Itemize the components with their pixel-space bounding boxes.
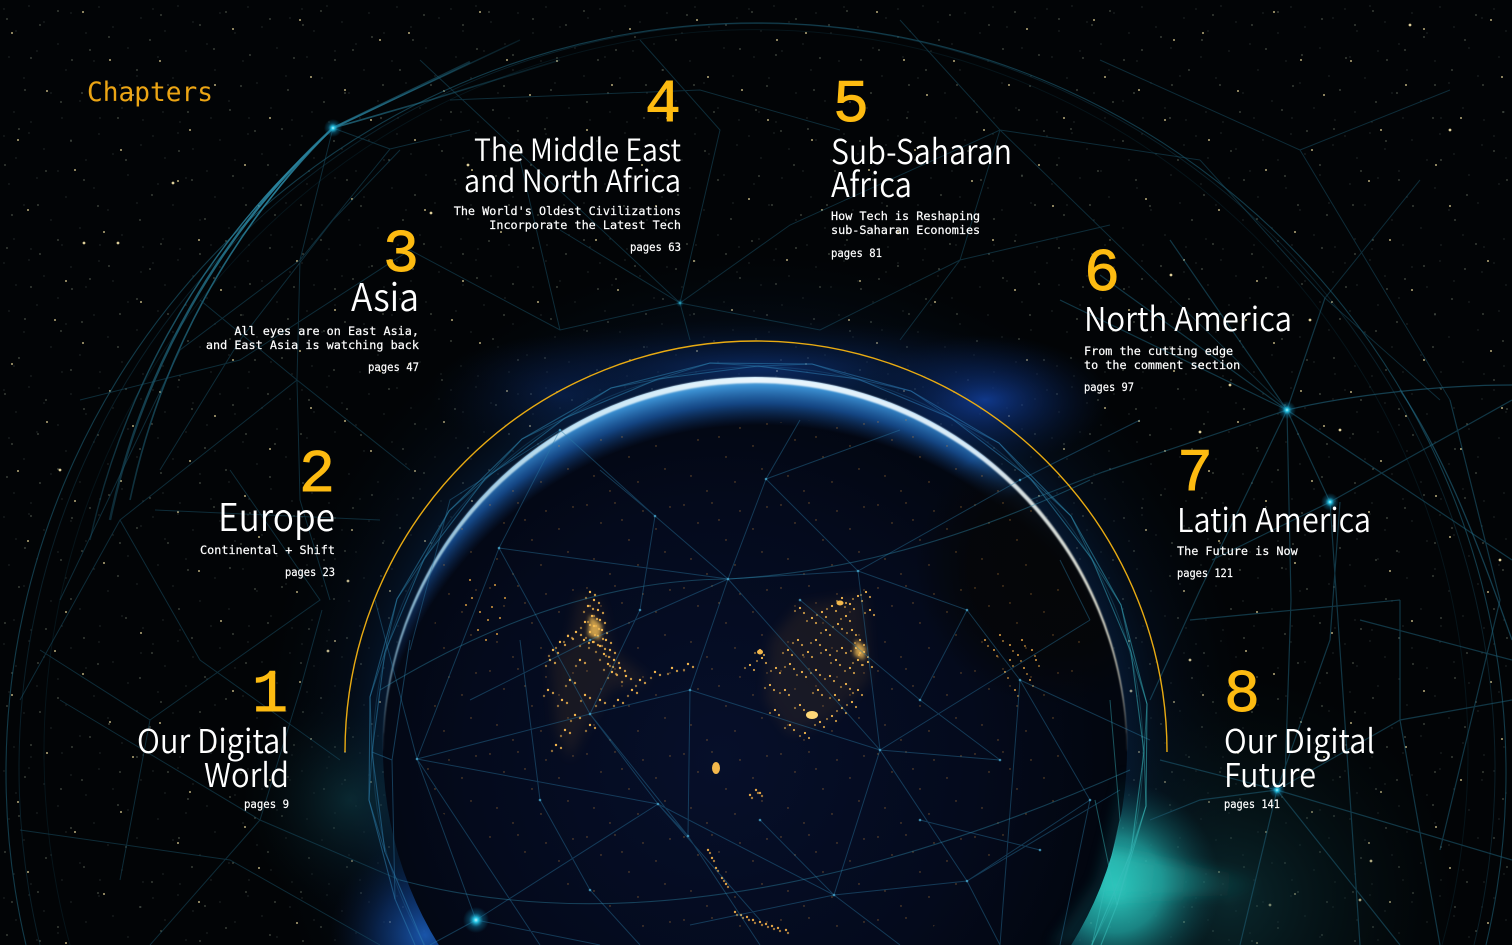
subtitle: sub-Saharan Economies: [831, 223, 980, 237]
subtitle: Continental + Shift: [200, 543, 335, 557]
chapter 5: [831, 72, 1012, 260]
subtitle: The Future is Now: [1177, 544, 1299, 558]
chapter 3: [206, 222, 419, 374]
heading: Chapters: Chapters: [87, 77, 213, 108]
title line 2: and North Africa: [464, 156, 681, 201]
pages: pages 63: [630, 240, 681, 254]
title line 1: Our Digital: [137, 715, 289, 763]
bottom-left hub: [463, 907, 489, 933]
city lights: southeast Asia: [708, 790, 788, 933]
title: Asia: [351, 267, 419, 322]
city lights: glow under clusters: [550, 595, 870, 760]
globe: [383, 377, 1185, 945]
chapter 4: [454, 72, 681, 254]
pages: pages 47: [368, 360, 419, 374]
chapter 7: [1177, 441, 1371, 580]
atmosphere band: [383, 377, 1127, 945]
lower-right limb tint: [1054, 789, 1124, 945]
chapter 1: [137, 662, 289, 811]
number 5: 5: [833, 72, 869, 140]
subtitle: Incorporate the Latest Tech: [489, 218, 681, 232]
city lights: China: [745, 592, 874, 738]
number 2: 2: [299, 442, 335, 510]
title: Latin America: [1177, 494, 1371, 542]
title line 2: Africa: [831, 158, 912, 207]
pages: pages 9: [244, 797, 289, 811]
subtitle: All eyes are on East Asia,: [234, 324, 419, 338]
city lights: dim scatter: [420, 410, 1090, 930]
subtitle: The World's Oldest Civilizations: [454, 204, 681, 218]
number 3: 3: [383, 222, 419, 290]
network over the globe: [375, 420, 1150, 945]
dark upper-right limb: [947, 460, 1106, 664]
title line 1: Our Digital: [1224, 715, 1375, 763]
city lights: Gulf: [466, 580, 505, 640]
subtitle: From the cutting edge: [1084, 344, 1233, 358]
subtitle: to the comment section: [1084, 358, 1240, 372]
title line 1: The Middle East: [474, 125, 681, 170]
number 7: 7: [1177, 441, 1213, 509]
pages: pages 23: [285, 565, 335, 579]
chapter 2: [200, 442, 335, 579]
bright city clusters: [588, 615, 866, 660]
title line 2: Future: [1224, 749, 1316, 797]
title line 2: World: [204, 749, 289, 797]
number 4: 4: [645, 72, 681, 140]
bright rim crescent: [383, 377, 1127, 752]
pages: pages 81: [831, 246, 882, 260]
network ring around the globe: [369, 363, 1147, 945]
pages: pages 141: [1224, 797, 1280, 811]
title: Europe: [218, 487, 335, 542]
title line 1: Sub-Saharan: [831, 125, 1012, 174]
subtitle: How Tech is Reshaping: [831, 209, 980, 223]
number 8: 8: [1224, 662, 1260, 730]
chapter 8: [1224, 662, 1375, 811]
number 6: 6: [1084, 241, 1120, 309]
yellow orbit arc: [345, 341, 1167, 752]
network hubs: [324, 119, 1339, 798]
subtitle: and East Asia is watching back: [206, 338, 419, 352]
title: North America: [1084, 293, 1292, 341]
city lights: Japan: [985, 635, 1039, 696]
city lights: India: [544, 592, 693, 751]
pages: pages 97: [1084, 380, 1134, 394]
number 1: 1: [252, 662, 288, 730]
chapter 6: [1084, 241, 1292, 394]
pages: pages 121: [1177, 566, 1233, 580]
